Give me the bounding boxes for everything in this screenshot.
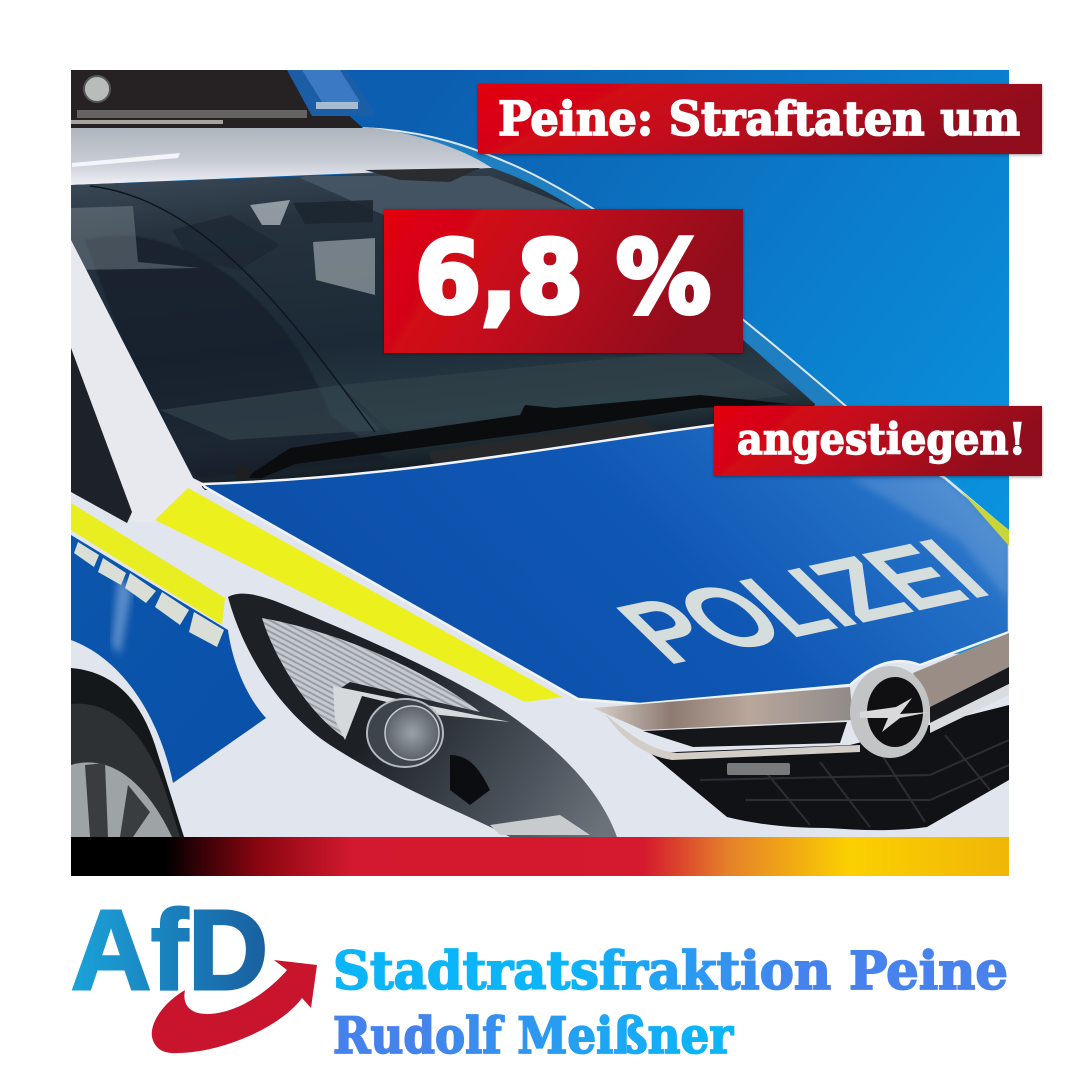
flag colour bar [71,837,1009,876]
wipers [235,395,790,481]
fender yellow stripe [155,488,562,702]
wheel rim [71,762,172,837]
hood lettering POLIZEI: POLIZEI [597,523,1010,679]
sky background [71,70,1009,654]
front grille [650,705,1009,830]
right A-pillar [360,128,848,412]
windshield dark lower reflection [85,236,390,478]
dash reflection [160,385,380,440]
roof [71,127,492,185]
car body base [71,340,1009,837]
windshield [71,168,815,490]
roof reflection in glass [300,176,585,215]
windshield seam [90,186,375,432]
reflective squares [74,542,224,647]
headline box: angestiegen!: angestiegen! [737,415,1026,465]
light bar [71,70,374,128]
figure box: 6,8 %: 6,8 % [415,219,711,336]
panel: police car photo [71,70,1010,837]
wheel arch and tyre [71,668,184,837]
logo: AfD with arrow: AfD [71,887,268,1013]
footer line: Stadtratsfraktion Peine: Stadtratsfraktion Peine [333,941,1008,1002]
panel reflection streak [112,575,132,655]
footer line: Rudolf Meißner: Rudolf Meißner [333,1006,734,1065]
roof marking [72,153,180,167]
headline box: angestiegen! [714,406,1042,476]
headline box: Peine: Straftaten um: Peine: Straftaten um [498,92,1020,147]
side window [71,348,132,523]
cage reflection [71,206,200,270]
door yellow stripe [71,503,225,625]
logo arrow [152,960,317,1053]
hood [203,408,1009,704]
headlight [228,594,617,837]
hood reflections [850,478,1009,600]
side blue panel [71,535,266,783]
logo: AfD with arrow [71,887,317,1053]
chrome bars [593,633,1009,760]
left A-pillar [71,240,203,487]
opel emblem [850,666,930,758]
